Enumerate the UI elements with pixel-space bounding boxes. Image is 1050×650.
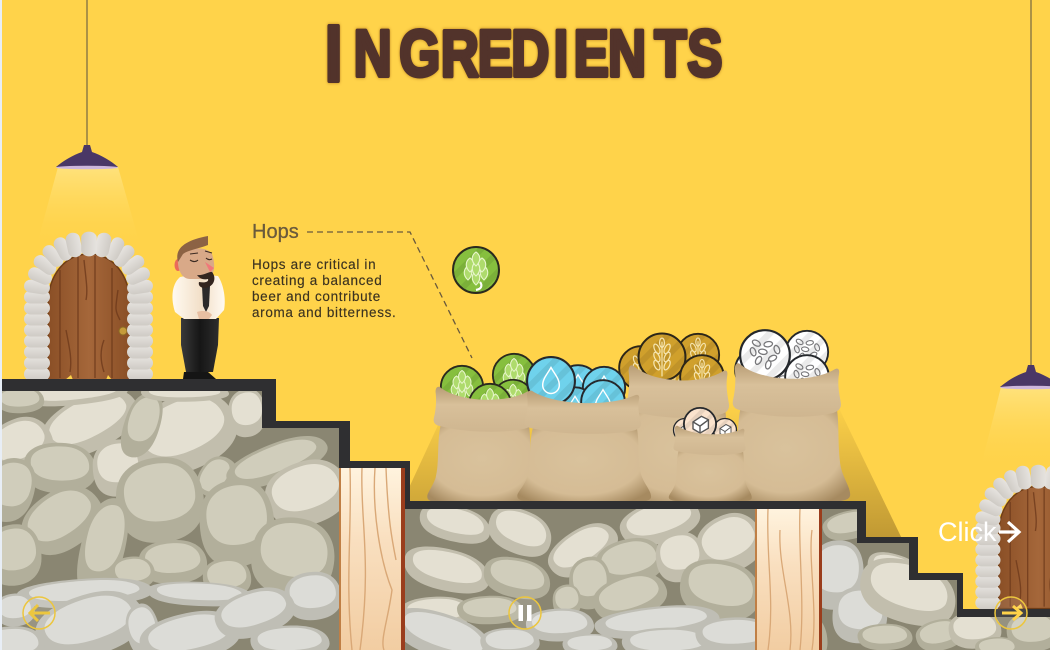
coins: hops: [441, 354, 535, 426]
button: previous: [23, 597, 55, 629]
nose: [205, 262, 214, 272]
left door with stone arch: [23, 231, 154, 380]
staircase outline: [2, 379, 1050, 650]
coins: water: [527, 357, 625, 429]
coins: sugar: [674, 408, 736, 442]
light cone behind sacks: [401, 400, 905, 545]
description text: creating a balanced: [252, 273, 382, 288]
button: pause: [509, 597, 541, 629]
hair: [177, 236, 208, 262]
sacks of ingredients: [427, 330, 850, 503]
heading: Ingredients: I: [325, 9, 343, 99]
description text: beer and contribute: [252, 289, 381, 304]
coins: grain: [619, 334, 724, 406]
sack: water: [517, 391, 651, 502]
tie: [202, 286, 210, 312]
sack: grain: [620, 365, 738, 501]
hands: [197, 311, 212, 319]
sack: sugar: [669, 426, 752, 501]
trousers: [181, 318, 219, 372]
shoes: [183, 372, 216, 379]
stone wall: [0, 377, 1050, 650]
dashed leader line: [307, 232, 472, 358]
heading: Ingredients: NGREDIENTS: [354, 16, 722, 90]
character: thinking man: [172, 236, 225, 379]
left page edge: [0, 0, 2, 650]
closed eyes: [190, 251, 212, 262]
wooden pillar left: [339, 468, 405, 650]
right lamp with light cone: [980, 0, 1050, 470]
wooden pillar right: [755, 509, 822, 650]
description text: aroma and bitterness.: [252, 305, 396, 320]
click label with arrow: Click: [938, 517, 997, 547]
left lamp with light cone: [36, 0, 141, 248]
shirt: [172, 274, 225, 319]
coins: rice: [735, 330, 829, 408]
button: next: [995, 597, 1027, 629]
sack: hops: [427, 387, 541, 503]
description text: Hops are critical in: [252, 257, 376, 272]
face: [178, 248, 214, 279]
ears: [174, 259, 182, 271]
sack: rice: [726, 363, 850, 502]
sub-heading: Hops: Hops: [252, 221, 299, 243]
beard: [197, 272, 214, 288]
icon: hop coin: [453, 247, 499, 293]
right door with stone arch: [975, 464, 1050, 609]
